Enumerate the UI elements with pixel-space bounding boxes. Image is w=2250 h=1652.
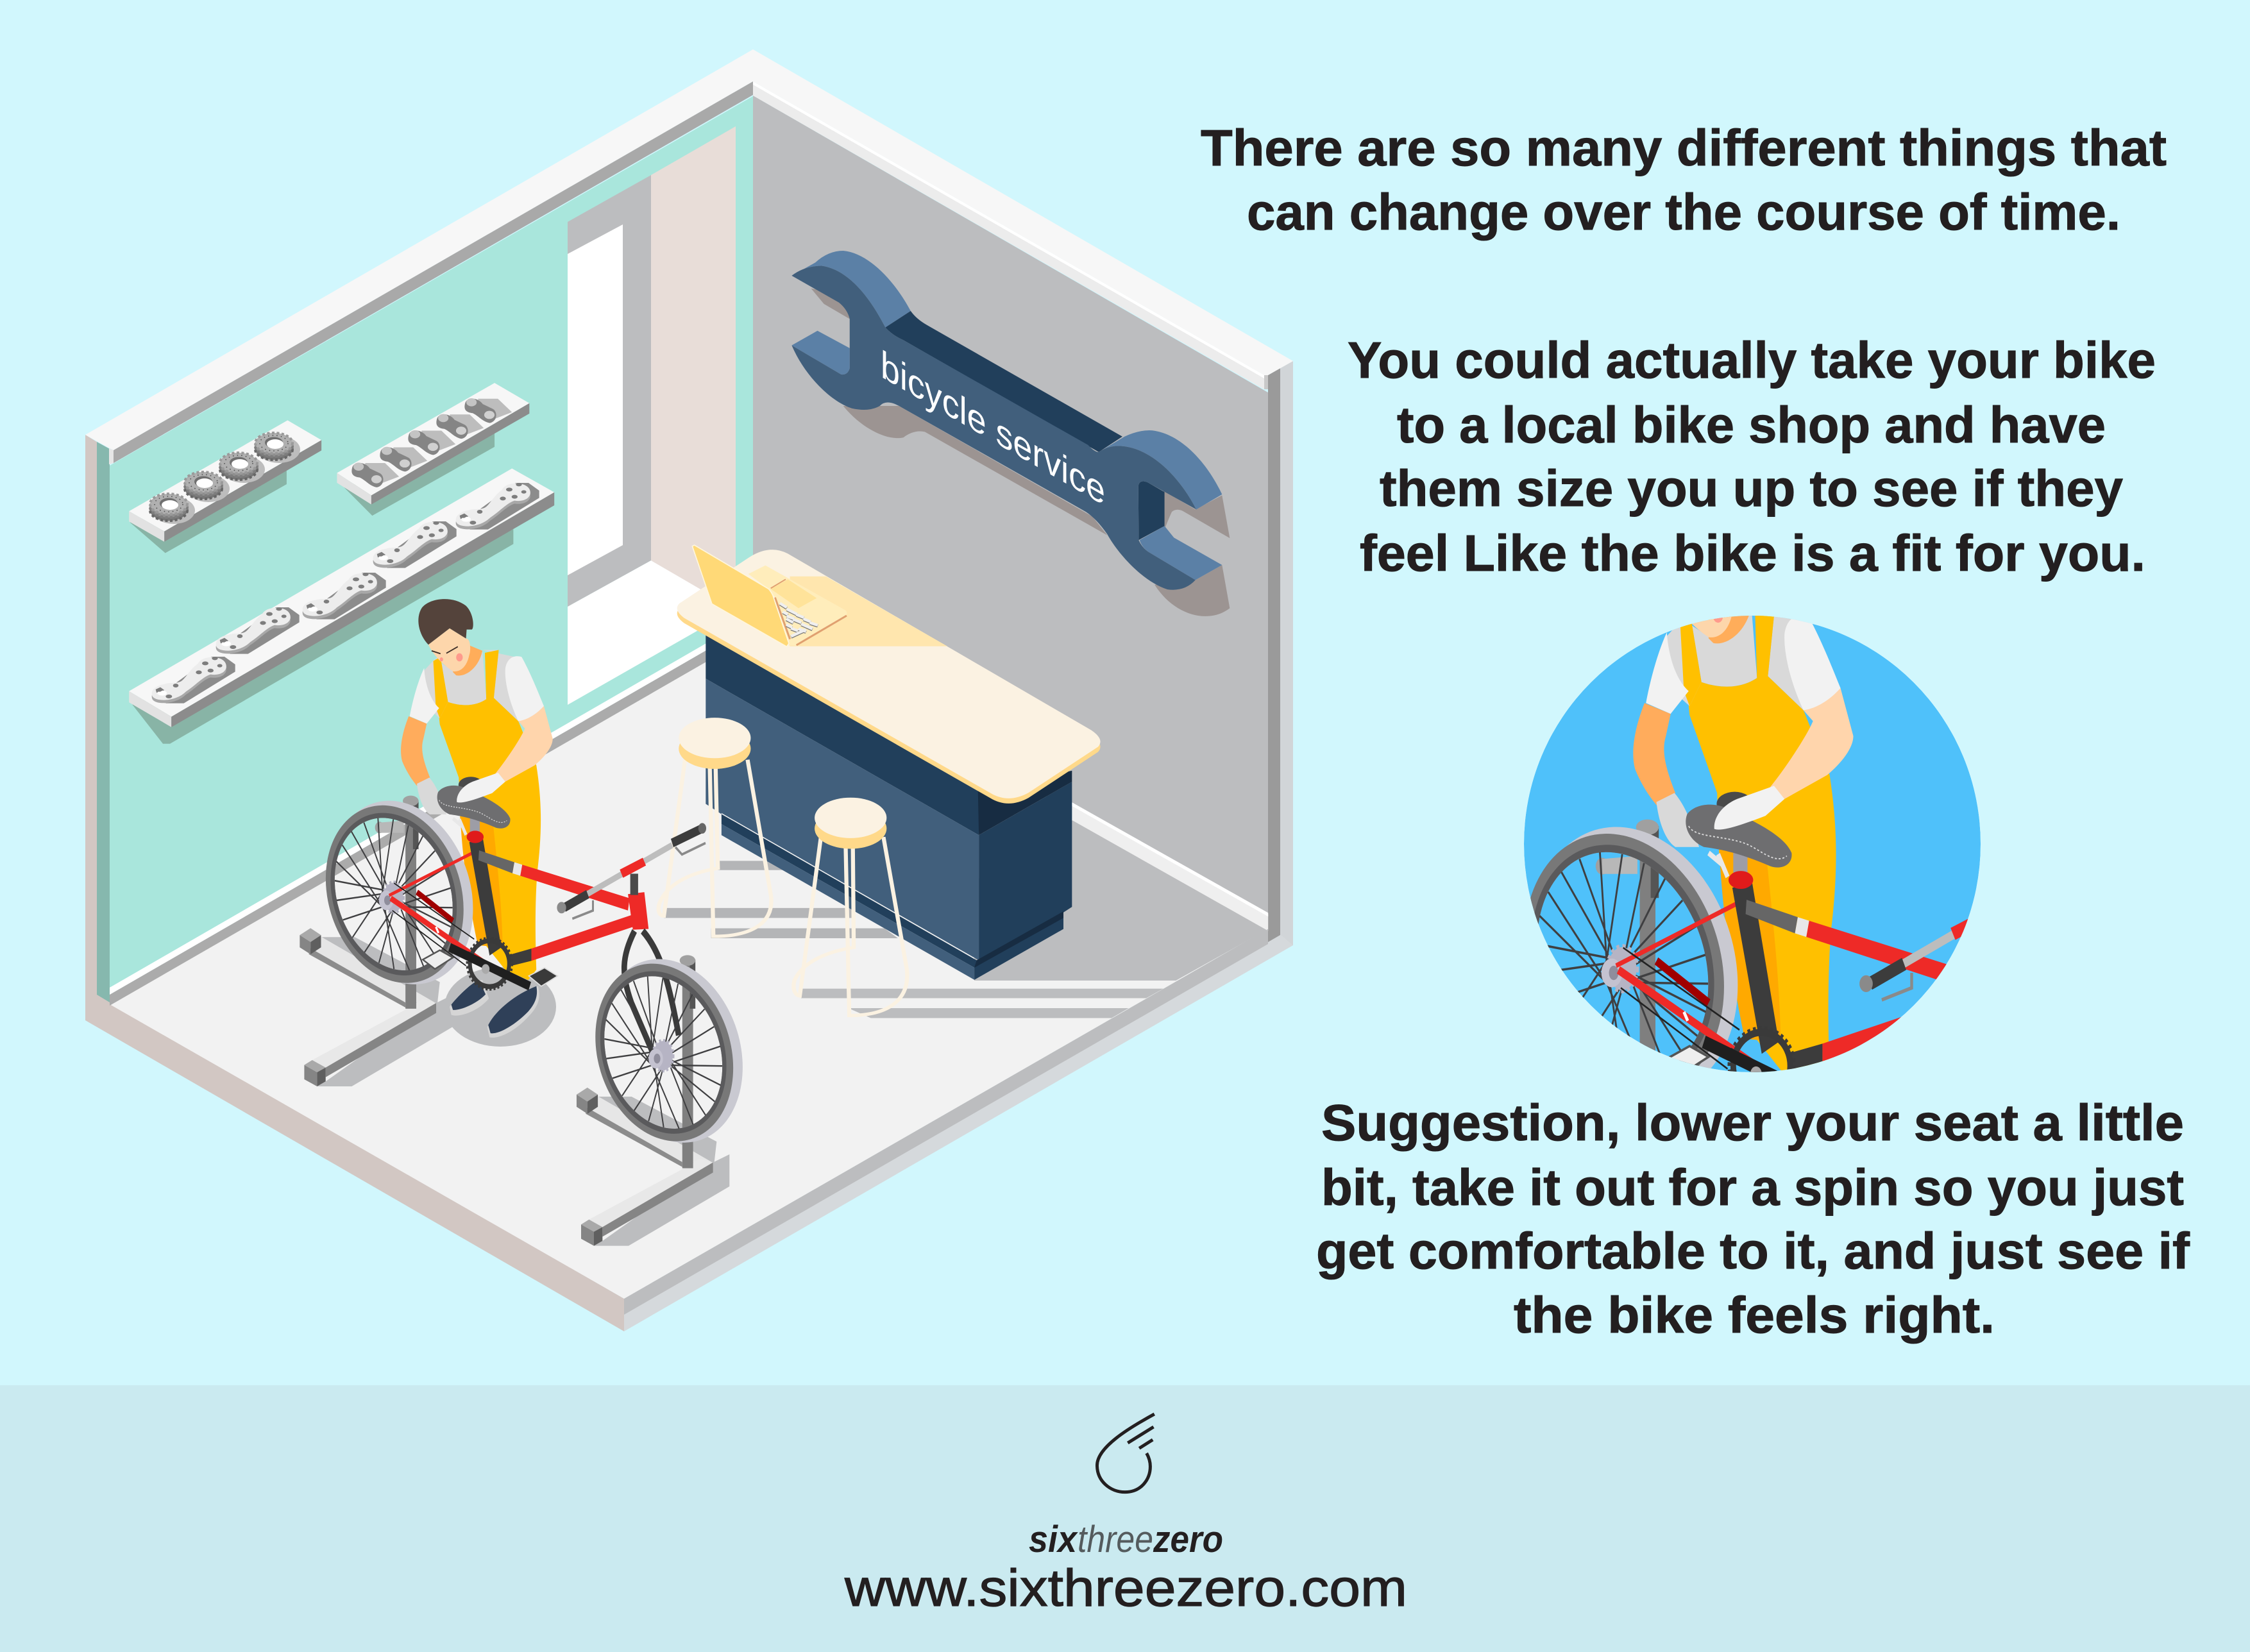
window (568, 126, 736, 705)
shelf: cassettes (129, 420, 321, 553)
front fork (624, 931, 679, 1056)
text block 2: to a local bike shop and have (1397, 396, 2106, 453)
illustration: isometric bike shop room (85, 49, 1293, 1331)
room shell (85, 49, 1293, 1331)
text block 3 (1316, 1094, 2190, 1344)
brand name: zero (1153, 1519, 1223, 1560)
worker floor shadow (444, 967, 556, 1047)
text block 1: can change over the course of time. (1247, 183, 2120, 240)
inset circle: close-up of saddle adjustment (1524, 616, 1981, 1072)
text block 3: bit, take it out for a spin so you just (1321, 1159, 2184, 1216)
saddle (437, 773, 511, 843)
text block 3: the bike feels right. (1514, 1286, 1995, 1344)
brand name (1029, 1519, 1223, 1560)
front wheel (595, 959, 743, 1143)
brand name: three (1078, 1519, 1153, 1560)
rear wheel (326, 801, 473, 984)
wrench sign (791, 251, 1230, 616)
worker and bicycle (326, 599, 743, 1168)
wrench sign text: bicycle service (881, 341, 1105, 514)
shoes (450, 980, 539, 1038)
text block 2 (1348, 332, 2156, 582)
floor shadows and baseboard (664, 802, 1268, 1018)
rear stand base bar (304, 995, 453, 1086)
text block 3: get comfortable to it, and just see if (1316, 1222, 2190, 1279)
laptop (692, 545, 847, 646)
shelf: tools (129, 468, 554, 744)
rear stand base arm (300, 928, 440, 1011)
text block 1 (1201, 119, 2167, 240)
text block 2: You could actually take your bike (1348, 332, 2156, 389)
shelf: chain links (337, 383, 529, 516)
footer band (0, 1385, 2250, 1652)
front stand base bar (581, 1154, 729, 1246)
counter (677, 550, 1101, 980)
text block 1: There are so many different things that (1201, 119, 2167, 176)
text block 3: Suggestion, lower your seat a little (1321, 1094, 2184, 1151)
stand posts (375, 796, 695, 1168)
icon: sixthreezero wing logo (1097, 1414, 1155, 1492)
bicycle frame (389, 818, 706, 989)
brand name: six (1029, 1519, 1079, 1560)
text block 2: feel Like the bike is a fit for you. (1360, 525, 2145, 582)
stool 2 (793, 798, 907, 1016)
stool 1 (659, 718, 772, 936)
text block 2: them size you up to see if they (1380, 460, 2124, 517)
shelves with parts (129, 383, 554, 744)
website url: www.sixthreezero.com (844, 1559, 1407, 1617)
worker figure (401, 599, 553, 980)
front stand base arm (577, 1088, 716, 1170)
